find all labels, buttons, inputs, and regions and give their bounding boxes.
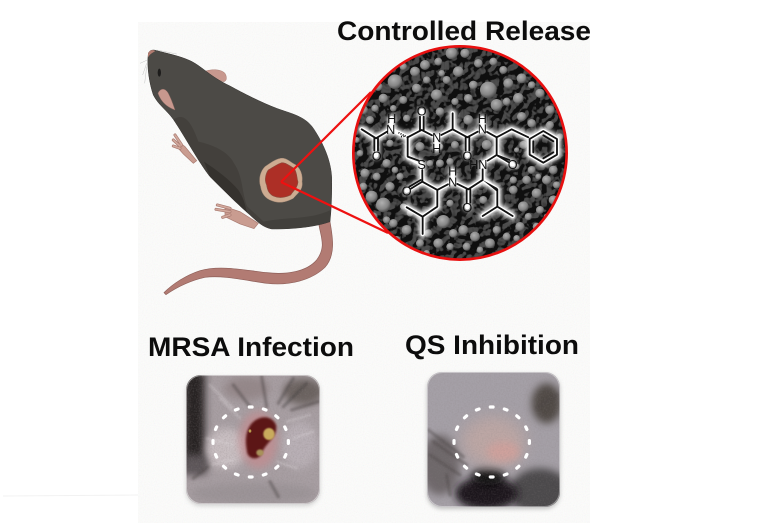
atom labels: S — [417, 158, 426, 172]
electron micrograph — [350, 43, 570, 263]
dashed outline — [213, 407, 288, 477]
heading: MRSA Infection: MRSA Infection — [148, 332, 354, 362]
molecule halo — [362, 111, 557, 234]
fur streaks — [427, 428, 469, 497]
near ear — [158, 89, 175, 110]
stereo wedges — [483, 180, 497, 191]
paper panel — [138, 22, 590, 523]
infected lesion — [239, 412, 278, 468]
atom labels: N — [478, 122, 487, 136]
fore paw — [173, 135, 197, 163]
atom labels: O — [462, 149, 472, 163]
body — [148, 50, 332, 229]
zoom lines — [281, 92, 388, 233]
title: Controlled Release: Controlled Release — [337, 16, 591, 46]
atom labels — [372, 105, 518, 215]
atom labels: N — [386, 123, 395, 137]
nose — [148, 50, 155, 57]
atom labels: H — [478, 112, 487, 126]
photo bevel — [428, 372, 560, 506]
atom labels: N — [432, 131, 441, 145]
fur streaks — [193, 377, 318, 497]
whiskers — [140, 50, 177, 83]
atom labels: H — [448, 165, 457, 179]
lens ring — [353, 46, 567, 260]
atom labels: N — [448, 176, 457, 190]
flank shading — [173, 117, 272, 229]
dashed outline — [454, 407, 529, 477]
tail — [164, 222, 333, 295]
wound — [260, 158, 302, 202]
atom labels: O — [372, 149, 382, 163]
atom labels: O — [508, 158, 518, 172]
photo bevel — [186, 376, 320, 504]
atom labels: O — [402, 184, 412, 198]
magnified lens — [350, 43, 570, 263]
photo: QS inhibition healed skin — [424, 372, 562, 512]
atom labels: O — [417, 105, 427, 119]
molecule structure — [362, 105, 557, 234]
atom labels: HN — [469, 158, 487, 172]
hind paw — [216, 205, 258, 229]
atom labels: H — [432, 142, 441, 156]
photo: MRSA infected wound — [183, 372, 323, 508]
atom labels: H — [387, 112, 396, 126]
atom labels: O — [462, 201, 472, 215]
heading: QS Inhibition: QS Inhibition — [405, 330, 579, 360]
mouse illustration — [140, 50, 333, 295]
eye — [158, 69, 161, 77]
far ear — [204, 70, 226, 82]
